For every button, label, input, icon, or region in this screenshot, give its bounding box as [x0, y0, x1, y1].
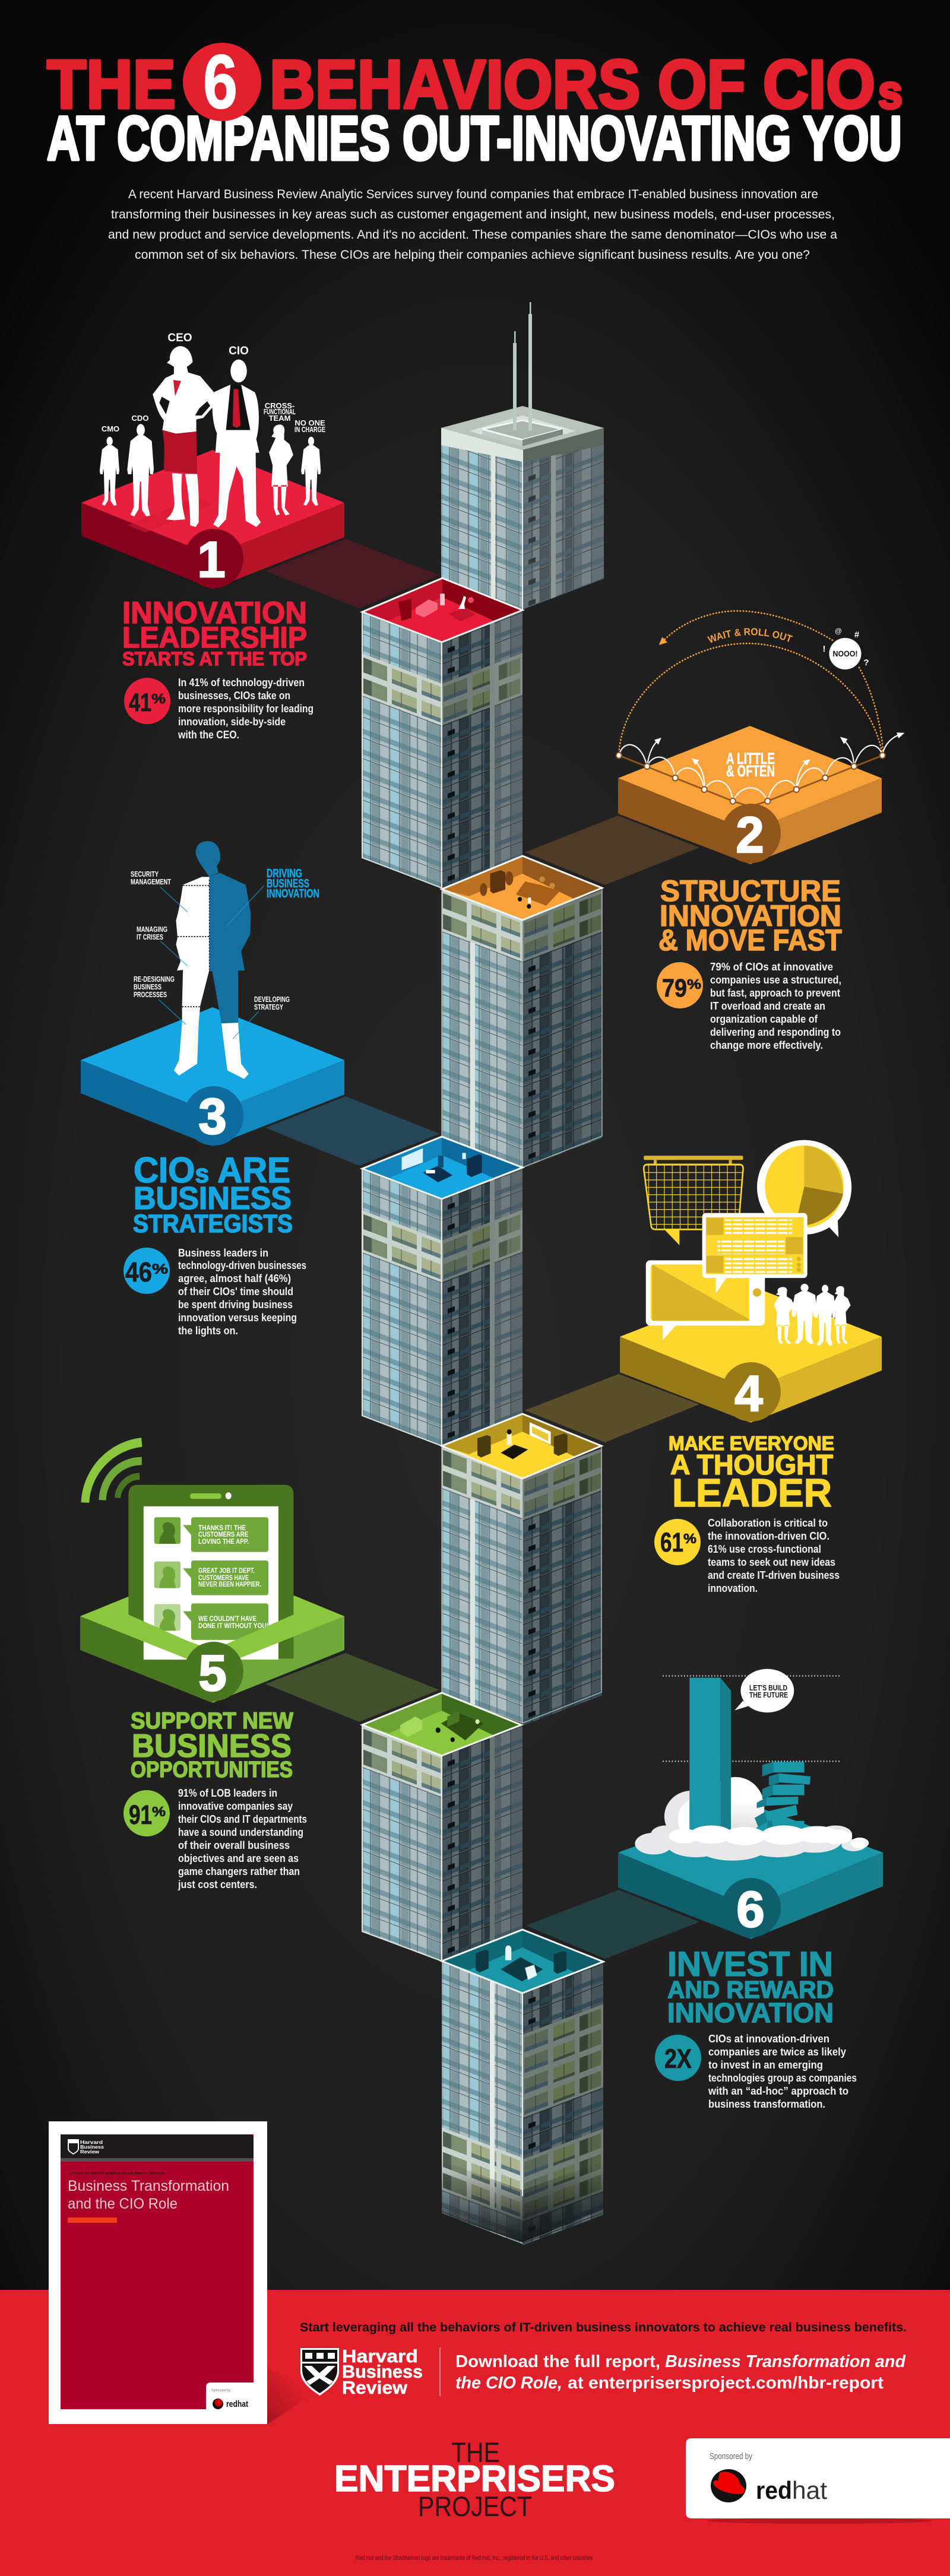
number 1: 1: [197, 532, 226, 588]
Harvard Business Review logo: Business: [342, 2361, 423, 2382]
text: behavior 4 description: innovation.: [708, 1582, 758, 1594]
labels: CIO responsibilities: PROCESSES: [134, 990, 167, 999]
tower segment: blue floor block: [362, 1168, 522, 1446]
heading: behavior 2: [658, 874, 842, 957]
platform 1: [81, 450, 344, 589]
text: behavior 4 description: 61% use cross-functional: [708, 1543, 821, 1555]
heading: behavior 5: [131, 1708, 293, 1782]
labels: leadership roles: CDO: [132, 414, 148, 423]
download message: [455, 2352, 906, 2393]
intro paragraph: and new product and service developments. And it's no accident. These companies share the same denominator—CIOs who use a: [108, 228, 837, 242]
room: orange floor: [442, 856, 602, 920]
stat: 91%: [124, 1790, 170, 1836]
tower segment: red floor block: [362, 611, 522, 888]
report cover: Business Transformation: [68, 2178, 229, 2194]
labels: CIO responsibilities: IT CRISES: [137, 932, 163, 941]
cover sponsor notch: redhat: [226, 2399, 248, 2409]
text: behavior 1 description: with the CEO.: [178, 729, 239, 741]
text: behavior 5 description: just cost centers.: [178, 1879, 257, 1890]
text: behavior 2 description: 79% of CIOs at innovative: [710, 961, 833, 973]
stat: 79%: 79: [662, 974, 687, 1003]
text: behavior 6 description: business transformation.: [708, 2098, 825, 2110]
room: yellow floor: [442, 1414, 601, 1479]
legal footnote: Red Hat and the Shadowman logo are trademarks of Red Hat, Inc., registered in the U.S. and other countries: [356, 2555, 593, 2562]
text: behavior 4 description: and create IT-driven business: [708, 1569, 840, 1581]
text: behavior 6 description: [708, 2033, 857, 2110]
illustration: CIO silhouette split by responsibilities: [159, 841, 264, 1079]
title: 6: [203, 39, 238, 125]
text: behavior 2 description: but fast, approach to prevent: [710, 987, 840, 999]
tower segment: rooftop block: [441, 302, 604, 610]
data table bubble: [702, 1213, 808, 1293]
cover HBR logo: Harvard: [80, 2140, 103, 2145]
stat: 61%: %: [683, 1531, 696, 1546]
labels: wait and roll out, nooo, a little and often: @: [835, 627, 842, 635]
heading: behavior 4: [669, 1432, 834, 1515]
room: red executive floor: [362, 578, 522, 642]
skyscraper tower: [362, 302, 604, 2245]
labels: CIO responsibilities: MANAGING: [137, 925, 167, 934]
text: behavior 5 description: [178, 1787, 307, 1890]
chat messages: DONE IT WITHOUT YOU!: [198, 1622, 268, 1630]
text: behavior 3 description: [178, 1247, 306, 1337]
text: behavior 3 description: the lights on.: [178, 1325, 238, 1337]
text: behavior 3 description: of their CIOs' time should: [178, 1286, 293, 1297]
report cover: A REPORT BY HARVARD BUSINESS REVIEW ANALYTIC SERVICES: [69, 2172, 165, 2175]
text: behavior 1 description: innovation, side-by-side: [178, 716, 286, 728]
labels: leadership roles: IN CHARGE: [294, 425, 325, 434]
labels: CIO responsibilities: STRATEGY: [254, 1003, 283, 1011]
chat messages: GREAT JOB IT DEPT.: [198, 1566, 255, 1575]
chat messages: NEVER BEEN HAPPIER.: [198, 1580, 261, 1588]
sponsor box: Red Hat: [686, 2438, 950, 2518]
report cover: and the CIO Role: [68, 2196, 178, 2212]
text: behavior 6 description: CIOs at innovation-driven: [708, 2033, 829, 2045]
text: behavior 4 description: the innovation-driven CIO.: [708, 1530, 829, 1542]
text: behavior 4 description: [708, 1517, 840, 1594]
download message: at enterprisersproject.com/hbr-report: [568, 2374, 884, 2393]
labels: leadership roles: TEAM: [269, 414, 290, 423]
speech bubble: [734, 1669, 794, 1712]
tower segment: orange floor block: [442, 888, 602, 1169]
The Enterprisers Project logo: THE: [451, 2437, 500, 2468]
stat: 91%: 91: [129, 1800, 152, 1830]
illustration: CEO and CIO leadership figures: [100, 346, 321, 528]
labels: wait and roll out, nooo, a little and often: ?: [863, 658, 869, 668]
heading: behavior 2: STRUCTURE: [660, 874, 841, 908]
title: BEHAVIORS OF CIO: [270, 46, 875, 123]
labels: wait and roll out, nooo, a little and often: WAIT & ROLL OUT: [707, 628, 793, 643]
chat messages: LOVING THE APP.: [198, 1537, 249, 1546]
labels: leadership roles: CMO: [102, 424, 119, 433]
illustration: tall tower and wobbly blocks on cloud: [635, 1669, 869, 1861]
target dotted lines: [663, 1676, 841, 1761]
labels: wait and roll out, nooo, a little and often: NOOO!: [832, 649, 857, 658]
number 6: 6: [736, 1882, 765, 1938]
front cloud: [635, 1826, 869, 1861]
title: s: [878, 65, 902, 118]
The Enterprisers Project logo: ENTERPRISERS: [334, 2458, 615, 2499]
illustration: release arcs, a little and often: [616, 611, 904, 807]
stat: 41%: 41: [129, 689, 151, 717]
cover sponsor notch: [206, 2383, 254, 2409]
heading: behavior 6: INVEST IN: [667, 1945, 833, 1984]
text: behavior 2 description: delivering and responding to: [710, 1026, 841, 1038]
stat: 61%: [654, 1519, 701, 1565]
text: behavior 2 description: IT overload and create an: [710, 1000, 825, 1012]
stat: 46%: %: [152, 1261, 168, 1277]
text: behavior 2 description: organization capable of: [710, 1013, 818, 1025]
The Enterprisers Project logo: PROJECT: [418, 2491, 532, 2522]
solid tower column: [689, 1678, 731, 1831]
stat: 61%: 61: [660, 1527, 683, 1557]
labels: CIO responsibilities: RE-DESIGNING: [134, 975, 175, 984]
platform 5 with tablet: [80, 1442, 344, 1703]
platform 3: [81, 1007, 344, 1146]
cover HBR logo: [68, 2139, 104, 2155]
labels: CIO responsibilities: MANAGEMENT: [131, 877, 171, 886]
labels: CIO responsibilities: DEVELOPING: [254, 995, 290, 1004]
intro paragraph: transforming their businesses in key areas such as customer engagement and insight, new business models, end-user processes,: [111, 208, 835, 221]
pie chart bubble: [757, 1140, 851, 1237]
text: behavior 3 description: Business leaders in: [178, 1247, 268, 1259]
stat: 46%: 46: [125, 1257, 152, 1287]
wifi signal arcs: [85, 1442, 142, 1503]
cover HBR logo: Review: [80, 2149, 100, 2155]
report cover: [49, 2121, 267, 2424]
intro paragraph: common set of six behaviors. These CIOs are helping their companies achieve significant business results. Are you one?: [135, 248, 810, 262]
sponsor box: Red Hat: red: [756, 2476, 792, 2504]
labels: CIO responsibilities: SECURITY: [131, 870, 159, 878]
labels: CIO responsibilities: BUSINESS: [267, 877, 309, 890]
labels: CIO responsibilities: INNOVATION: [267, 887, 319, 900]
stat: 2X: 2X: [664, 2044, 692, 2074]
label: lets build the future: [749, 1683, 788, 1699]
labels: leadership roles: CEO: [167, 332, 192, 344]
footer red band: [0, 2290, 950, 2576]
book shadow: [267, 2368, 315, 2425]
heading: behavior 6: INNOVATION: [667, 1997, 834, 2028]
download message: Business Transformation and: [665, 2352, 906, 2371]
chat messages: [198, 1524, 268, 1630]
labels: wait and roll out, nooo, a little and often: !: [823, 644, 825, 654]
text: behavior 6 description: with an “ad-hoc” approach to: [708, 2085, 848, 2097]
illustration: thought leadership speech bubbles: [644, 1140, 851, 1346]
label: lets build the future: LET'S BUILD: [749, 1683, 787, 1692]
team silhouettes: [774, 1284, 851, 1346]
text: behavior 4 description: teams to seek out new ideas: [708, 1556, 835, 1568]
Harvard Business Review logo: [300, 2346, 423, 2398]
chat messages: CUSTOMERS ARE: [198, 1530, 248, 1538]
heading: behavior 2: INNOVATION: [660, 899, 841, 932]
Harvard Business Review logo: Review: [342, 2377, 408, 2398]
text: behavior 1 description: businesses, CIOs take on: [178, 690, 290, 702]
grid bubble: [644, 1156, 743, 1245]
tower segment: yellow floor block: [442, 1446, 602, 1726]
cover sponsor notch: Sponsored by: [211, 2389, 230, 2393]
labels: CIO responsibilities: BUSINESS: [134, 982, 162, 991]
sponsor box: Red Hat: Sponsored by: [710, 2451, 752, 2461]
room: green floor: [362, 1693, 521, 1756]
labels: leadership roles: CROSS-: [265, 401, 294, 410]
labels: leadership roles: CIO: [229, 345, 249, 357]
chat messages: CUSTOMERS HAVE: [198, 1573, 249, 1582]
stat: 91%: %: [152, 1804, 166, 1819]
heading: behavior 6: AND REWARD: [667, 1976, 834, 2003]
chat messages: THANKS IT! THE: [198, 1524, 246, 1532]
text: behavior 5 description: objectives and are seen as: [178, 1852, 299, 1864]
Harvard Business Review logo: Harvard: [342, 2346, 418, 2366]
number 4: 4: [734, 1366, 763, 1422]
text: behavior 3 description: technology-driven businesses: [178, 1260, 306, 1271]
text: behavior 2 description: change more effectively.: [710, 1039, 823, 1051]
platform 6: [618, 1804, 883, 1939]
number 3: 3: [198, 1089, 227, 1145]
text: behavior 3 description: agree, almost half (46%): [178, 1273, 291, 1284]
labels: leadership roles: FUNCTIONAL: [264, 407, 296, 416]
labels: leadership roles: NO ONE: [294, 418, 325, 427]
label: lets build the future: THE FUTURE: [749, 1690, 788, 1699]
text: behavior 2 description: [710, 961, 841, 1051]
heading: behavior 3: [133, 1150, 293, 1238]
sponsor box: Red Hat: hat: [792, 2476, 827, 2504]
title: [47, 39, 902, 173]
heading: behavior 4: A THOUGHT: [670, 1449, 833, 1480]
heading: behavior 1: [122, 596, 307, 670]
text: behavior 5 description: 91% of LOB leaders in: [178, 1787, 277, 1799]
text: behavior 1 description: In 41% of technology-driven: [178, 677, 305, 689]
heading: behavior 4: MAKE EVERYONE: [669, 1432, 834, 1454]
stat: 79%: [657, 962, 703, 1008]
text: behavior 5 description: innovative companies say: [178, 1800, 293, 1812]
download message: Download the full report,: [455, 2352, 660, 2371]
stat: 46%: [124, 1248, 170, 1294]
heading: behavior 5: SUPPORT NEW: [131, 1708, 293, 1734]
heading: behavior 1: INNOVATION: [122, 596, 307, 630]
text: behavior 1 description: more responsibility for leading: [178, 703, 314, 715]
heading: behavior 1: LEADERSHIP: [122, 621, 307, 654]
text: behavior 5 description: their CIOs and IT departments: [178, 1813, 307, 1825]
platform 2: [618, 726, 882, 864]
text: behavior 5 description: game changers rather than: [178, 1866, 300, 1877]
number 5: 5: [198, 1645, 227, 1702]
heading: behavior 3: CIOs ARE: [134, 1150, 290, 1190]
heading: behavior 5: OPPORTUNITIES: [131, 1757, 293, 1782]
block stack: [755, 1762, 810, 1832]
tower segment: teal floor block: [442, 1961, 604, 2245]
heading: behavior 4: LEADER: [672, 1471, 832, 1515]
divider: [439, 2347, 441, 2396]
platform 4: [620, 1286, 882, 1423]
chat messages: WE COULDN'T HAVE: [198, 1614, 256, 1623]
stat: 2X: [655, 2035, 701, 2081]
intro paragraph: A recent Harvard Business Review Analytic Services survey found companies that embrace IT-enabled business innovation are: [128, 188, 818, 201]
tablet bubble: [646, 1260, 765, 1340]
text: behavior 1 description: [178, 677, 314, 741]
labels: leadership roles: [102, 332, 325, 434]
labels: CIO responsibilities: [131, 867, 319, 1011]
back clouds: [664, 1777, 828, 1848]
tower segment: green floor block: [362, 1725, 522, 1962]
call to action sentence: Start leveraging all the behaviors of IT-driven business innovators to achieve real business benefits.: [300, 2321, 907, 2334]
number 2: 2: [736, 807, 764, 864]
stat: 79%: %: [687, 976, 701, 992]
text: behavior 5 description: of their overall business: [178, 1839, 290, 1851]
text: behavior 6 description: companies are twice as likely: [708, 2046, 846, 2058]
labels: wait and roll out, nooo, a little and often: A LITTLE: [726, 750, 775, 767]
text: behavior 3 description: innovation versus keeping: [178, 1312, 297, 1324]
text: behavior 2 description: companies use a structured,: [710, 974, 841, 986]
stat: 41%: %: [151, 691, 166, 706]
cover HBR logo: Business: [80, 2144, 104, 2150]
room: teal floor: [442, 1930, 603, 1993]
text: behavior 6 description: technologies group as companies: [708, 2072, 857, 2084]
shield: [300, 2348, 339, 2396]
connector beams: [265, 539, 699, 1959]
text: behavior 3 description: be spent driving business: [178, 1299, 293, 1311]
download message: the CIO Role,: [455, 2374, 562, 2393]
text: behavior 5 description: have a sound understanding: [178, 1826, 303, 1838]
labels: CIO responsibilities: DRIVING: [267, 867, 302, 880]
heading: behavior 2: & MOVE FAST: [658, 924, 842, 957]
sponsor box shadow: [707, 2518, 932, 2524]
tablet device: [128, 1485, 293, 1660]
stat: 41%: [124, 678, 170, 724]
heading: behavior 6: [667, 1945, 834, 2028]
labels: wait and roll out, nooo, a little and often: [707, 627, 869, 780]
heading: behavior 1: STARTS AT THE TOP: [122, 648, 307, 670]
labels: wait and roll out, nooo, a little and often: #: [854, 630, 860, 640]
labels: wait and roll out, nooo, a little and often: & OFTEN: [726, 762, 775, 780]
text: behavior 6 description: to invest in an emerging: [708, 2059, 823, 2071]
title: THE: [47, 46, 176, 123]
room: blue floor: [362, 1137, 522, 1199]
The Enterprisers Project logo: [334, 2437, 615, 2522]
heading: behavior 5: BUSINESS: [132, 1727, 292, 1764]
intro paragraph: [108, 188, 837, 262]
text: behavior 4 description: Collaboration is critical to: [708, 1517, 828, 1529]
heading: behavior 3: BUSINESS: [134, 1181, 292, 1216]
heading: behavior 3: STRATEGISTS: [133, 1210, 293, 1238]
Red Hat shadowman icon: [711, 2469, 746, 2502]
platform front lip over tablet: [80, 1595, 344, 1669]
